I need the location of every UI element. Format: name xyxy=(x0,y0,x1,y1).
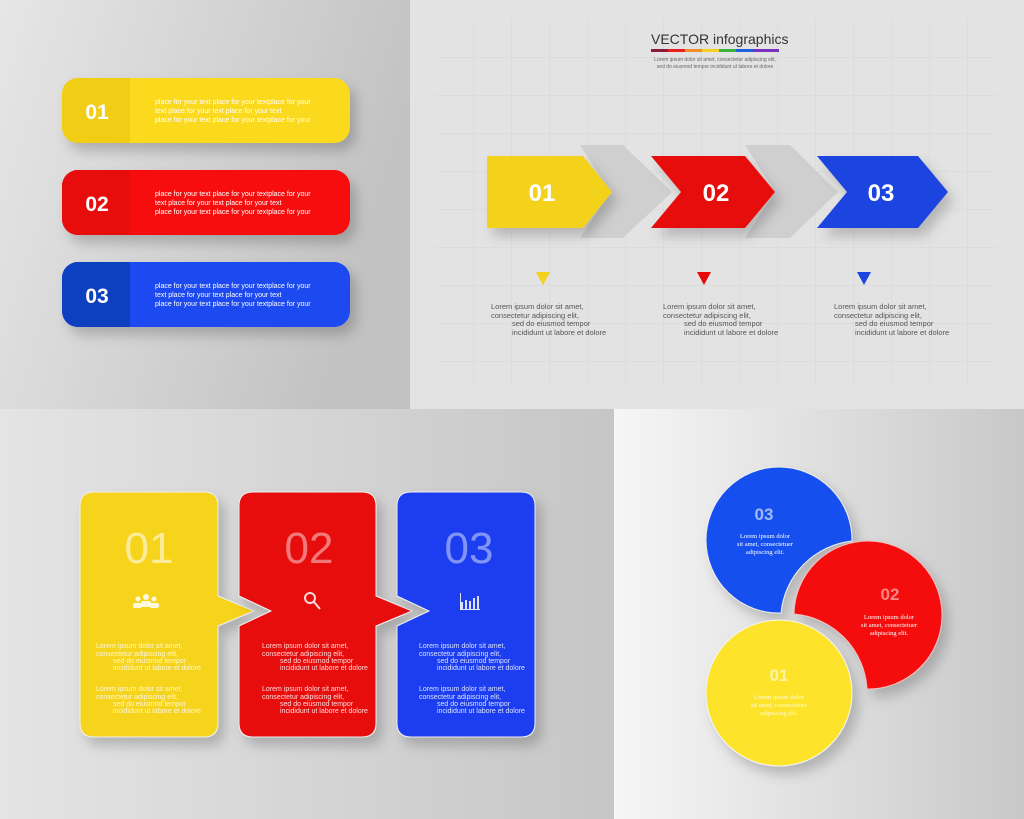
circle: 03 blue: Lorem ipsum dolor xyxy=(740,533,791,540)
card: 02 red: consectetur adipiscing elit, xyxy=(262,651,344,658)
card: 01 yellow: Lorem ipsum dolor sit amet, xyxy=(96,686,182,693)
card: 02 red: 02 xyxy=(285,524,333,573)
panel: top-left background xyxy=(0,0,410,409)
card: 03 blue xyxy=(397,492,535,737)
bar: 01 yellow: place for your text place for your textplace for your xyxy=(155,99,311,106)
markers and captions: consectetur adipiscing elit, xyxy=(491,311,579,320)
card: 01 yellow: incididunt ut labore et dolore xyxy=(113,708,201,715)
bar: 03 blue: text place for your text place for your text xyxy=(155,292,282,299)
card: 03 blue: consectetur adipiscing elit, xyxy=(419,694,501,701)
card: 01 yellow: sed do eiusmod tempor xyxy=(113,658,187,665)
bar: 01 yellow: place for your text place for your textplace for your xyxy=(155,117,311,124)
bar: 01 yellow xyxy=(62,78,350,143)
title: VECTOR infographics xyxy=(651,31,788,70)
arrow 03: 03 xyxy=(868,180,894,207)
gray chevron 2 xyxy=(745,145,838,238)
card: 03 blue: incididunt ut labore et dolore xyxy=(437,665,525,672)
markers and captions: sed do eiusmod tempor xyxy=(855,319,934,328)
markers and captions: Lorem ipsum dolor sit amet, xyxy=(663,302,756,311)
bar: 03 blue: place for your text place for your textplace for your xyxy=(155,301,311,308)
card: 01 yellow: Lorem ipsum dolor sit amet, xyxy=(96,643,182,650)
card: 03 blue: incididunt ut labore et dolore xyxy=(437,708,525,715)
card: 01 yellow: 01 xyxy=(125,524,173,573)
circle: 02 red: sit amet, consectetuer xyxy=(861,622,918,629)
arrow 01 xyxy=(487,156,612,228)
markers and captions: sed do eiusmod tempor xyxy=(684,319,763,328)
circle: 01 yellow: adipiscing elit. xyxy=(760,710,799,717)
card: 02 red: Lorem ipsum dolor sit amet, xyxy=(262,686,348,693)
bar: 02 red: 02 xyxy=(85,193,109,216)
card: 03 blue: sed do eiusmod tempor xyxy=(437,658,511,665)
arrow 02 xyxy=(651,156,775,228)
panel: top-right background xyxy=(410,0,1024,409)
gray chevron 1 xyxy=(580,145,672,238)
circle: 03 blue: adipiscing elit. xyxy=(746,549,785,556)
circle: 02 red: Lorem ipsum dolor xyxy=(864,614,915,621)
bar: 03 blue: 03 xyxy=(85,285,109,308)
circle: 03 blue xyxy=(706,467,852,613)
circle: 03 blue: sit amet, consectetuer xyxy=(737,541,794,548)
title: VECTOR infographics: VECTOR infographics xyxy=(651,31,788,47)
card: 01 yellow: consectetur adipiscing elit, xyxy=(96,651,178,658)
circle: 02 red xyxy=(794,541,942,689)
card: 02 red: consectetur adipiscing elit, xyxy=(262,694,344,701)
card: 02 red: sed do eiusmod tempor xyxy=(280,701,354,708)
card: 01 yellow: consectetur adipiscing elit, xyxy=(96,694,178,701)
bar: 03 blue xyxy=(62,262,350,327)
arrow 01: 01 xyxy=(529,180,555,207)
circle: 02 red: 02 xyxy=(881,585,899,604)
circle: 01 yellow: sit amet, consectetuer xyxy=(751,702,808,709)
card: 02 red: incididunt ut labore et dolore xyxy=(280,708,368,715)
markers and captions xyxy=(491,272,949,337)
title: VECTOR infographics: sed do eiusmod tempor incididunt ut labore et dolore xyxy=(657,64,773,70)
markers and captions: Lorem ipsum dolor sit amet, xyxy=(491,302,584,311)
arrow process row xyxy=(487,145,948,238)
card: 03 blue: 03 xyxy=(445,524,493,573)
bar: 02 red: place for your text place for your textplace for your xyxy=(155,209,311,216)
bar: 02 red xyxy=(62,170,350,235)
bar: 02 red: text place for your text place for your text xyxy=(155,200,282,207)
card: 02 red: Lorem ipsum dolor sit amet, xyxy=(262,643,348,650)
panel: bottom-right background xyxy=(614,409,1024,819)
card: 02 red xyxy=(239,492,412,737)
markers and captions: consectetur adipiscing elit, xyxy=(834,311,922,320)
card: 03 blue: Lorem ipsum dolor sit amet, xyxy=(419,643,505,650)
card: 01 yellow: sed do eiusmod tempor xyxy=(113,701,187,708)
panel: bottom-left background xyxy=(0,409,614,819)
circle: 02 red: adipiscing elit. xyxy=(870,630,909,637)
markers and captions: consectetur adipiscing elit, xyxy=(663,311,751,320)
card: 03 blue: Lorem ipsum dolor sit amet, xyxy=(419,686,505,693)
markers and captions: sed do eiusmod tempor xyxy=(512,319,591,328)
circle: 01 yellow: 01 xyxy=(770,666,788,685)
card: 03 blue: consectetur adipiscing elit, xyxy=(419,651,501,658)
circle: 01 yellow xyxy=(706,620,852,766)
markers and captions: incididunt ut labore et dolore xyxy=(684,328,778,337)
arrow 02: 02 xyxy=(703,180,729,207)
bar: 03 blue: place for your text place for your textplace for your xyxy=(155,283,311,290)
icon: magnifier xyxy=(305,593,320,609)
circle: 03 blue: 03 xyxy=(755,505,773,524)
circle: 01 yellow: Lorem ipsum dolor xyxy=(754,694,805,701)
markers and captions: Lorem ipsum dolor sit amet, xyxy=(834,302,927,311)
icon: people xyxy=(133,594,159,608)
bar: 01 yellow: 01 xyxy=(85,101,109,124)
card: 02 red: incididunt ut labore et dolore xyxy=(280,665,368,672)
arrow 03 xyxy=(817,156,948,228)
markers and captions: incididunt ut labore et dolore xyxy=(855,328,949,337)
card: 02 red: sed do eiusmod tempor xyxy=(280,658,354,665)
card: 03 blue: sed do eiusmod tempor xyxy=(437,701,511,708)
bar: 01 yellow: text place for your text place for your text xyxy=(155,108,282,115)
card: 01 yellow: incididunt ut labore et dolore xyxy=(113,665,201,672)
icon: chart xyxy=(460,593,480,610)
bar: 02 red: place for your text place for your textplace for your xyxy=(155,191,311,198)
card: 01 yellow xyxy=(80,492,254,737)
markers and captions: incididunt ut labore et dolore xyxy=(512,328,606,337)
title: VECTOR infographics: Lorem ipsum dolor sit amet, consectetur adipiscing elit, xyxy=(654,57,776,63)
